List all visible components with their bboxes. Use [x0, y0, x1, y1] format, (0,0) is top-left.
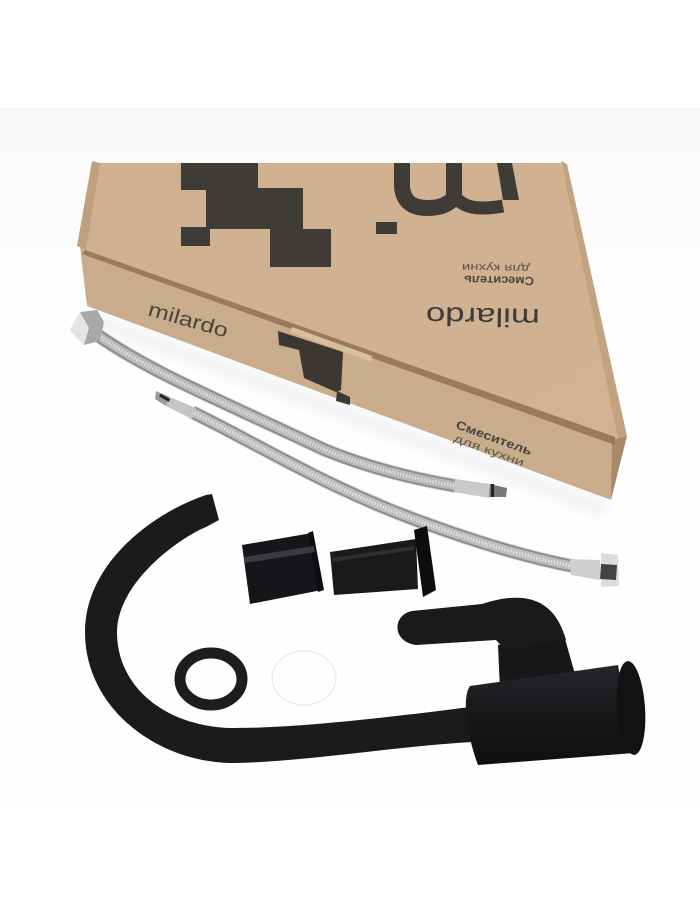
- side logo square: [336, 391, 350, 405]
- box left flap: [77, 161, 100, 250]
- lid shadow band: [82, 250, 615, 445]
- lid text: brand: milardo: [426, 301, 540, 333]
- side text: product: Смеситель: [454, 418, 534, 458]
- box right flap: [561, 161, 627, 438]
- hose nut left: [70, 310, 104, 345]
- long braided hose: [70, 310, 507, 498]
- rubber washer: [180, 653, 242, 705]
- box side panel: [80, 246, 615, 500]
- box lid: [79, 163, 626, 440]
- hose tip right: [454, 479, 507, 498]
- lid text: product: Смеситель: [464, 273, 534, 288]
- lid text: purpose: для кухни: [462, 261, 530, 274]
- faucet body: [466, 665, 634, 765]
- faucet spout: [85, 494, 472, 763]
- faucet neck: [498, 632, 575, 690]
- flap seam: [290, 327, 372, 362]
- faucet body flange: [614, 660, 648, 756]
- short hose nut: [570, 553, 619, 587]
- mounting nut: [242, 531, 324, 604]
- pixel logo on lid: [181, 163, 331, 267]
- letter m on lid: [402, 163, 519, 208]
- logo square: [376, 222, 397, 234]
- side text: brand: milardo: [146, 299, 231, 342]
- cardboard box: [77, 161, 627, 500]
- pixel logo on side: [278, 331, 343, 392]
- short braided hose: [155, 391, 619, 587]
- clear washer: [272, 651, 336, 705]
- faucet lever: [397, 598, 566, 650]
- faucet: [85, 494, 648, 765]
- side text: purpose: для кухни: [452, 433, 526, 469]
- threaded stud: [330, 526, 436, 597]
- short hose tip: [155, 391, 196, 419]
